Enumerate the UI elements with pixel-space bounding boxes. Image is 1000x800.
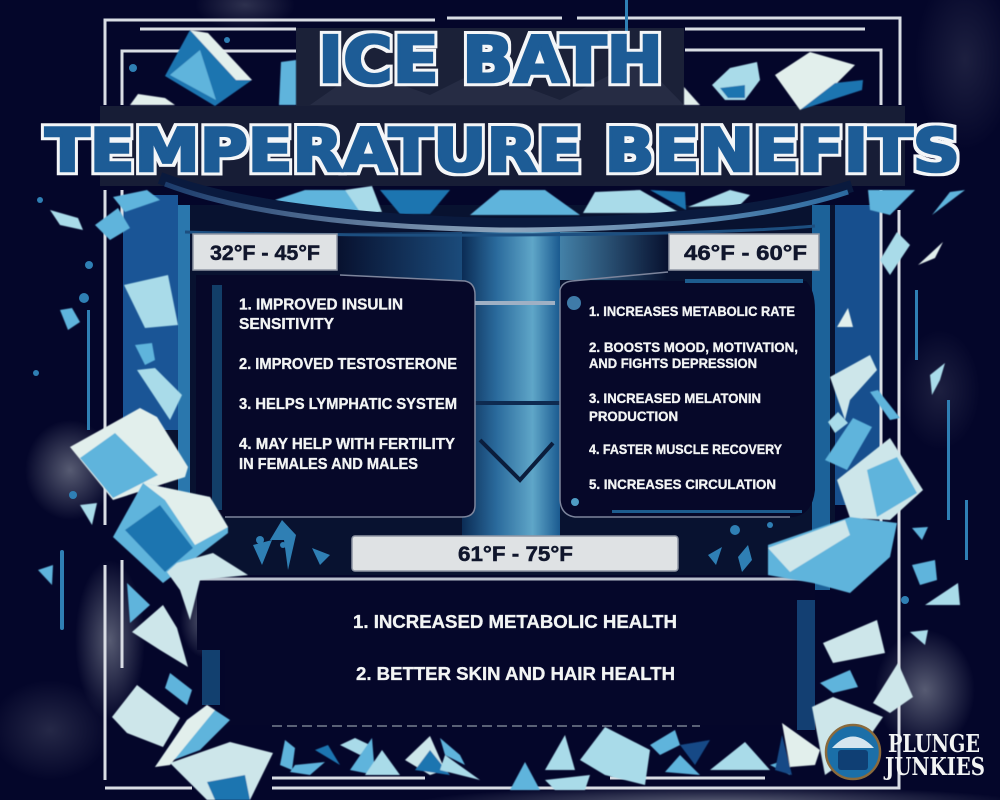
tub body [123,195,880,590]
label: 46F-60F [669,234,819,270]
list: 61F benefits [353,611,677,684]
ice in tub [275,186,750,215]
list: 46F benefits: AND FIGHTS DEPRESSION [589,356,757,371]
icons: ice at top of frame [130,30,863,110]
list: 32F benefits [239,296,457,473]
list: 32F benefits: 3. HELPS LYMPHATIC SYSTEM [239,396,457,413]
title [45,24,960,186]
panel: 61F-75F benefits [197,579,815,730]
list: 32F benefits: 2. IMPROVED TESTOSTERONE [239,356,457,373]
list: 46F benefits: 3. INCREASED MELATONIN [589,391,761,406]
list: 46F benefits: PRODUCTION [589,409,678,424]
list: 61F benefits: 2. BETTER SKIN AND HAIR HEALTH [356,663,675,684]
label: 32F-45F: 32°F - 45°F [210,242,320,265]
frame [105,18,900,788]
icons: ice right side [768,190,965,775]
logo: Plunge Junkies: PLUNGE [888,729,980,758]
panel: 46F-60F benefits [560,272,815,517]
title: ICE BATH [318,24,663,98]
list: 46F benefits: 4. FASTER MUSCLE RECOVERY [589,442,782,457]
label: 61F-75F [352,536,678,571]
list: 46F benefits: 2. BOOSTS MOOD, MOTIVATION, [589,340,798,355]
label: 61F-75F: 61°F - 75°F [458,543,573,566]
icons: ice bottom row [280,723,820,790]
label: 32F-45F [193,234,337,270]
list: 46F benefits: 1. INCREASES METABOLIC RATE [589,304,795,319]
logo: Plunge Junkies [826,725,985,781]
title: TEMPERATURE BENEFITS [45,116,960,186]
list: 32F benefits: 1. IMPROVED INSULIN [239,296,403,314]
list: 46F benefits: 5. INCREASES CIRCULATION [589,477,776,492]
title backdrop [100,28,905,186]
list: 32F benefits: SENSITIVITY [239,316,335,333]
label: 46F-60F: 46°F - 60°F [684,242,807,265]
tub rim [160,178,852,235]
decorative droplets and streaks [33,0,968,630]
icons: ice bottom-left pile [112,685,273,800]
list: 32F benefits: 4. MAY HELP WITH FERTILITY [239,436,456,453]
panel: 32F-45F benefits [196,275,475,517]
list: 32F benefits: IN FEMALES AND MALES [239,456,418,473]
list: 46F benefits [589,304,798,492]
list: 61F benefits: 1. INCREASED METABOLIC HEALTH [353,611,677,632]
icons: ice left side [38,190,248,705]
icon: connecting bar [475,296,581,506]
